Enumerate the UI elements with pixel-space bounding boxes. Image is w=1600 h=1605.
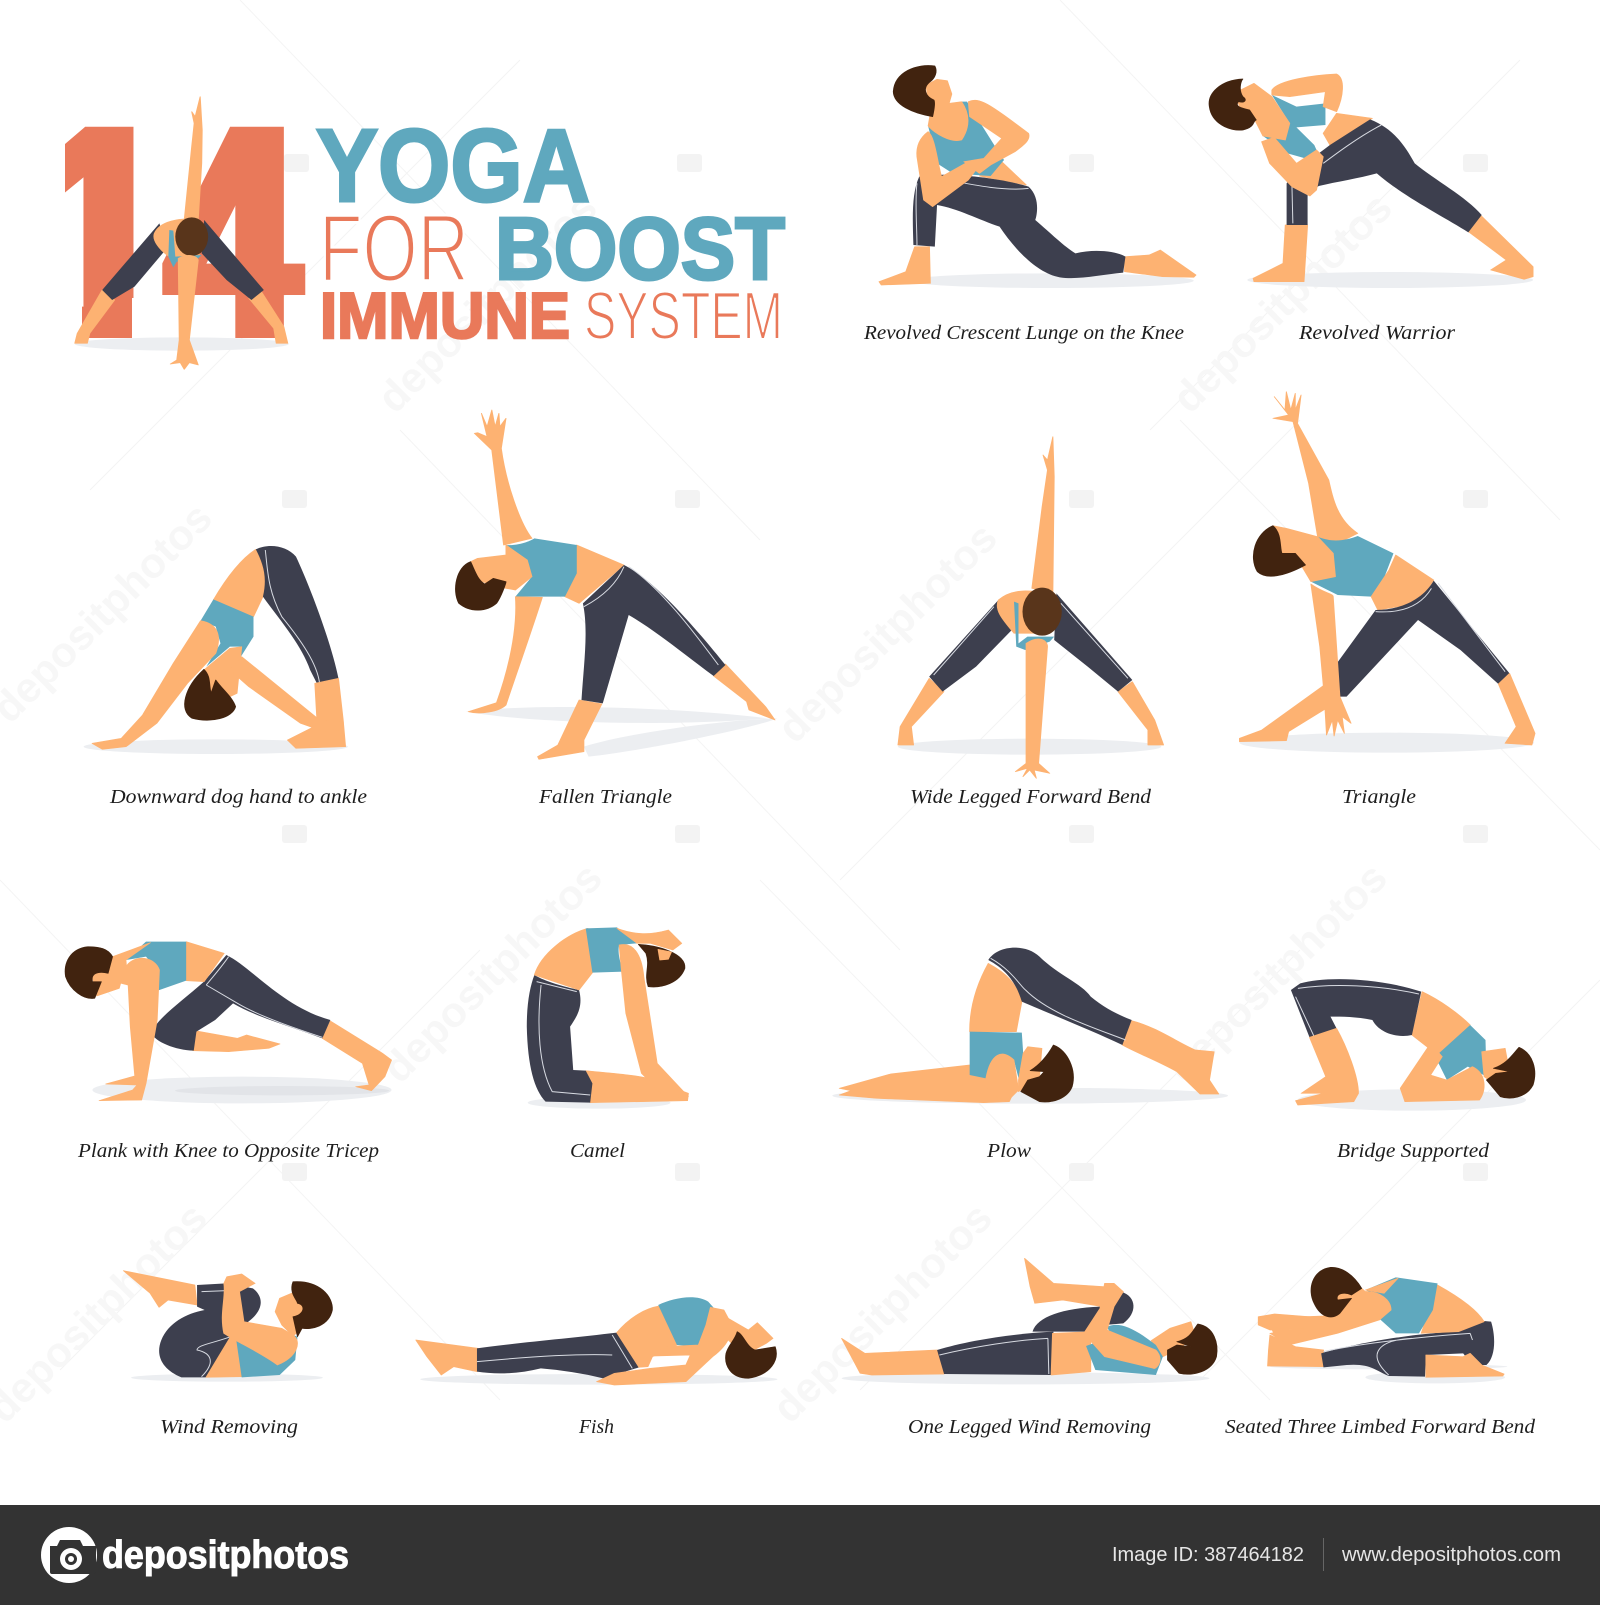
title block — [65, 126, 786, 340]
label: Camel — [570, 1140, 625, 1162]
brand name: depositphotos — [102, 1534, 349, 1577]
pose: Plank with Knee to Opposite Tricep — [65, 942, 392, 1162]
watermark text — [0, 184, 1401, 1431]
figure: title pose — [75, 97, 289, 369]
label: Fish — [578, 1416, 614, 1438]
figure — [1291, 979, 1535, 1111]
figure — [416, 1297, 777, 1385]
watermark text: depositphotos — [768, 514, 1006, 751]
figure — [879, 66, 1196, 288]
pose: Camel — [527, 927, 688, 1162]
watermark text: depositphotos — [373, 854, 611, 1091]
big number 14: 14 — [38, 60, 299, 403]
label: Plow — [986, 1140, 1032, 1162]
figure — [898, 437, 1164, 778]
title line: BOOST: BOOST — [495, 199, 785, 298]
figure — [123, 1271, 332, 1382]
pose: Downward dog hand to ankle — [84, 546, 367, 808]
title line: YOGA: YOGA — [316, 108, 590, 223]
figure — [1258, 1267, 1507, 1383]
figure — [832, 948, 1228, 1104]
watermark cameras — [282, 154, 1488, 1181]
figure — [456, 410, 777, 759]
label: Triangle — [1342, 786, 1416, 808]
figure — [65, 942, 392, 1103]
pose: Triangle — [1239, 392, 1535, 808]
pose: Plow — [832, 948, 1228, 1162]
label: Fallen Triangle — [538, 786, 672, 808]
label: Wide Legged Forward Bend — [910, 786, 1152, 808]
figure — [527, 927, 688, 1109]
icon: camera logo — [41, 1527, 97, 1583]
label: Revolved Crescent Lunge on the Knee — [863, 322, 1184, 344]
figure — [1239, 392, 1535, 753]
label: Downward dog hand to ankle — [109, 786, 367, 808]
watermark text: depositphotos — [763, 1194, 1001, 1431]
footer band — [0, 1505, 1600, 1605]
label: Seated Three Limbed Forward Bend — [1225, 1416, 1536, 1438]
image id: Image ID: 387464182 — [1112, 1544, 1304, 1566]
pose: Fish — [416, 1297, 777, 1438]
pose: Wide Legged Forward Bend — [898, 437, 1164, 808]
pose: One Legged Wind Removing — [842, 1258, 1217, 1438]
label: Wind Removing — [160, 1416, 298, 1438]
pose: Wind Removing — [123, 1271, 332, 1438]
pose: Revolved Crescent Lunge on the Knee — [863, 66, 1196, 344]
title line: IMMUNE: IMMUNE — [320, 279, 570, 352]
label: One Legged Wind Removing — [908, 1416, 1151, 1438]
pose: Seated Three Limbed Forward Bend — [1225, 1267, 1536, 1438]
website: www.depositphotos.com — [1341, 1544, 1561, 1566]
title line: SYSTEM: SYSTEM — [584, 278, 783, 354]
figure — [84, 546, 348, 754]
watermark text: depositphotos — [1163, 184, 1401, 421]
pose: Revolved Warrior — [1209, 74, 1533, 344]
label: Bridge Supported — [1337, 1140, 1490, 1162]
title line: FOR: FOR — [319, 195, 469, 302]
pose: Fallen Triangle — [456, 410, 777, 808]
label: Plank with Knee to Opposite Tricep — [77, 1140, 379, 1162]
figure — [842, 1258, 1217, 1384]
watermark text: depositphotos — [368, 184, 606, 421]
watermark text: depositphotos — [1158, 854, 1396, 1091]
pose: Bridge Supported — [1291, 979, 1535, 1162]
figure — [1209, 74, 1533, 288]
label: Revolved Warrior — [1298, 322, 1455, 344]
